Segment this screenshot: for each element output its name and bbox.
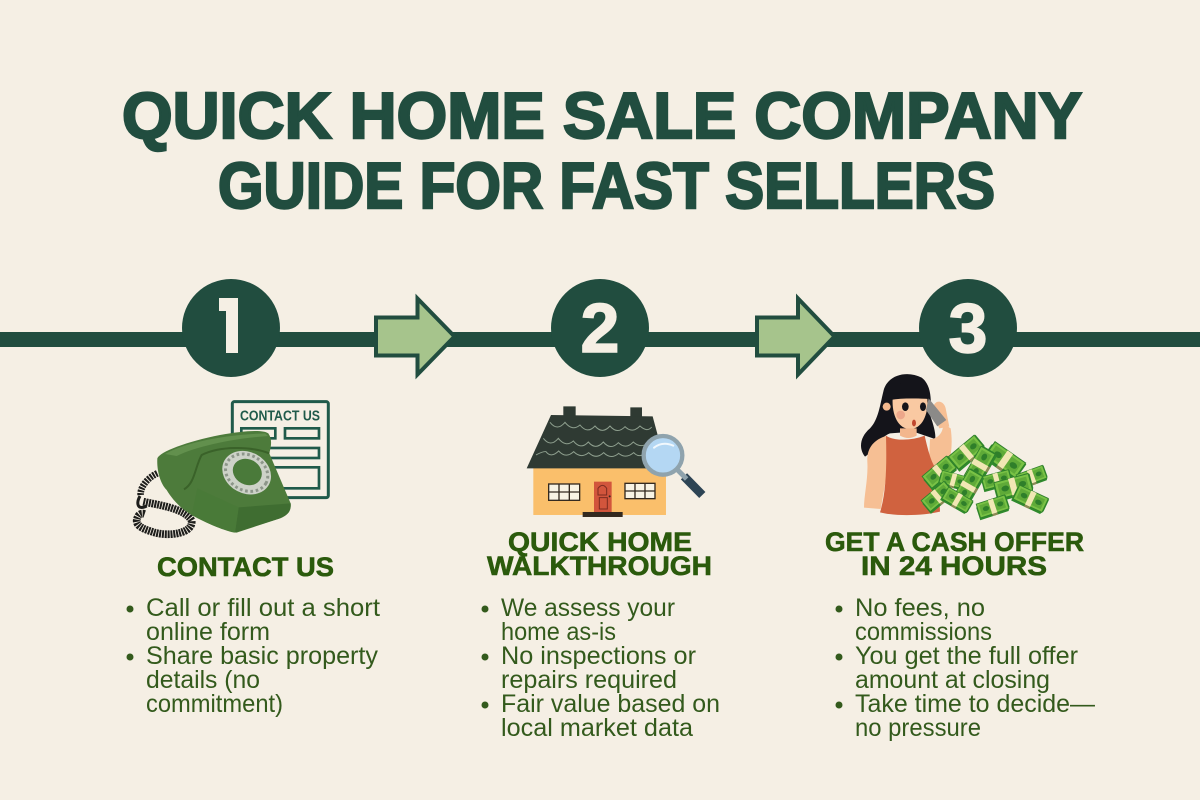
cash pile	[920, 434, 1049, 520]
torso dress	[880, 436, 940, 515]
step 1 bullet list: commitment)	[146, 690, 283, 718]
step 1 bullet list: Call or fill out a short	[146, 594, 380, 622]
step 2 heading	[487, 527, 712, 581]
icon: contact us form	[232, 402, 328, 498]
step 2 bullet list: No inspections or	[501, 642, 696, 670]
step 2 bullet list: local market data	[501, 714, 693, 742]
step 3 heading: GET A CASH OFFER	[825, 527, 1084, 557]
icon: woman on phone with cash pile	[861, 374, 1049, 520]
step 2 bullet list	[482, 594, 720, 742]
step 3 number badge	[919, 279, 1017, 377]
step 1 bullet list: online form	[146, 618, 270, 646]
step 3 bullet list: You get the full offer	[855, 642, 1078, 670]
roof	[527, 415, 667, 468]
doorstep	[583, 512, 623, 517]
step 3 bullet list: no pressure	[855, 714, 981, 742]
step 3 bullet list: No fees, no	[855, 594, 985, 622]
step 1 heading: CONTACT US	[157, 552, 334, 582]
phone in hand	[926, 398, 949, 428]
hair back	[861, 374, 935, 457]
icon: green rotary phone	[137, 431, 291, 534]
right window	[625, 483, 655, 499]
title	[122, 79, 1082, 222]
eyes cheeks mouth	[896, 402, 926, 426]
timeline bar	[0, 332, 1200, 347]
arms and shoulders	[864, 423, 952, 509]
title: GUIDE FOR FAST SELLERS	[218, 149, 995, 222]
step 1 number badge: 1	[231, 352, 232, 354]
chimneys	[563, 406, 642, 418]
icon: contact us form: CONTACT US	[240, 408, 320, 424]
step 2 heading: WALKTHROUGH	[487, 551, 712, 581]
step 1 bullet list: details (no	[146, 666, 260, 694]
step 2 heading: QUICK HOME	[508, 527, 692, 557]
icon: house with magnifying glass	[527, 406, 702, 517]
step 3 heading	[825, 527, 1084, 581]
step 1 bullet list: Share basic property	[146, 642, 378, 670]
step 3 bullet list: commissions	[855, 618, 992, 646]
step 1 number badge	[182, 279, 280, 377]
step 2 number badge	[551, 279, 649, 377]
magnifying glass	[644, 436, 702, 495]
left window	[549, 484, 580, 500]
step 2 number badge: 2	[581, 289, 619, 367]
step 3 number badge: 3	[949, 289, 987, 367]
door	[594, 482, 612, 512]
step 2 bullet list: We assess your	[501, 594, 675, 622]
step 1 bullet list	[126, 594, 380, 718]
step 2 bullet list: repairs required	[501, 666, 677, 694]
step 3 bullet list: amount at closing	[855, 666, 1050, 694]
step 3 bullet list	[836, 594, 1095, 742]
arrow: step 1 to step 2	[376, 298, 454, 374]
step 3 heading: IN 24 HOURS	[861, 551, 1047, 581]
icon: contact form and rotary phone	[137, 402, 328, 534]
step 2 bullet list: Fair value based on	[501, 690, 720, 718]
title: QUICK HOME SALE COMPANY	[122, 79, 1082, 152]
house walls	[533, 467, 666, 515]
step 3 bullet list: Take time to decide—	[855, 690, 1095, 718]
face	[893, 398, 927, 429]
arrow: step 2 to step 3	[757, 298, 834, 374]
step 2 bullet list: home as-is	[501, 618, 616, 646]
hair fringe	[890, 381, 929, 400]
